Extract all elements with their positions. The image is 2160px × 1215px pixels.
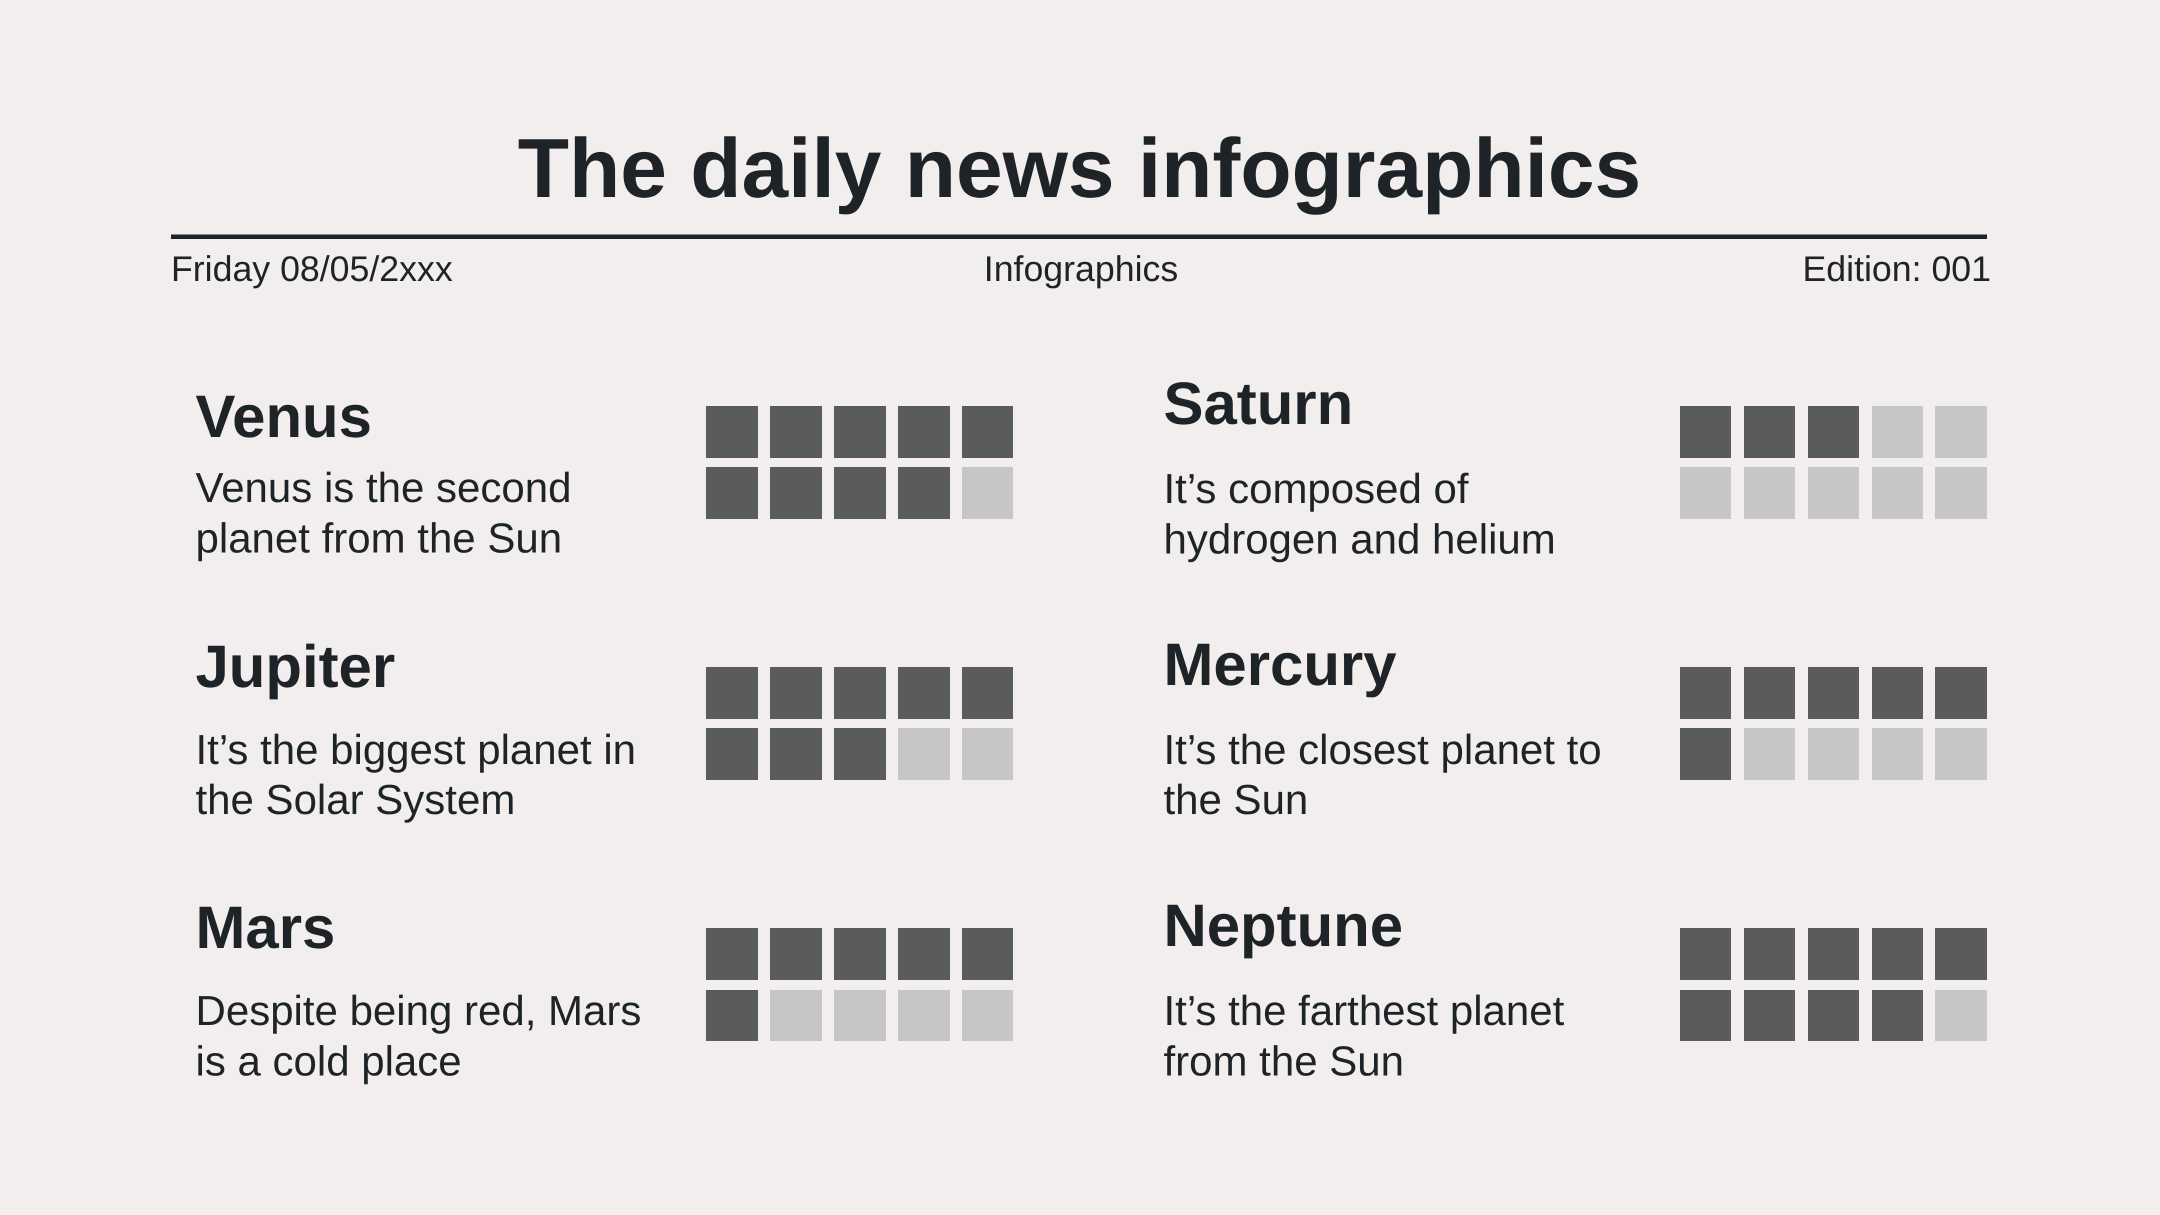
heading: Mercury: Mercury xyxy=(1164,631,1397,698)
description: Venus: planet from the Sun xyxy=(196,514,562,562)
description: Mars: is a cold place xyxy=(196,1038,462,1084)
panel: Mars xyxy=(196,894,1013,1084)
heading: Neptune: Neptune xyxy=(1164,892,1403,959)
rating grid: Mars 6 of 10 xyxy=(706,928,1013,1041)
section label: Infographics xyxy=(984,249,1178,289)
heading: Saturn: Saturn xyxy=(1164,370,1353,437)
heading: Venus: Venus xyxy=(196,383,372,450)
panel: Saturn xyxy=(1164,370,1987,562)
description: Jupiter: It’s the biggest planet in xyxy=(196,726,636,773)
heading: Mars: Mars xyxy=(196,894,335,961)
panel: Jupiter xyxy=(196,633,1013,823)
panel: Mercury xyxy=(1164,631,1987,823)
panel: Venus xyxy=(196,383,1013,562)
description: Saturn: It’s composed of xyxy=(1164,465,1469,512)
title: The daily news infographics xyxy=(518,121,1641,215)
date: Friday 08/05/2xxx xyxy=(171,249,453,289)
description: Jupiter: the Solar System xyxy=(196,776,515,823)
rating grid: Neptune 9 of 10 xyxy=(1680,928,1987,1041)
rating grid: Venus 9 of 10 xyxy=(706,406,1013,519)
rating grid: Saturn 3 of 10 xyxy=(1680,406,1987,519)
edition: Edition: 001 xyxy=(1802,249,1991,289)
rating grid: Jupiter 8 of 10 xyxy=(706,667,1013,780)
panel: Neptune xyxy=(1164,892,1987,1084)
rating grid: Mercury 6 of 10 xyxy=(1680,667,1987,780)
description: Saturn: hydrogen and helium xyxy=(1164,516,1556,562)
description: Neptune: from the Sun xyxy=(1164,1038,1404,1084)
description: Mars: Despite being red, Mars xyxy=(196,987,641,1034)
heading: Jupiter: Jupiter xyxy=(196,633,395,700)
description: Venus: Venus is the second xyxy=(196,464,571,511)
description: Mercury: It’s the closest planet to xyxy=(1164,726,1602,773)
description: Mercury: the Sun xyxy=(1164,776,1308,823)
description: Neptune: It’s the farthest planet xyxy=(1164,987,1565,1034)
